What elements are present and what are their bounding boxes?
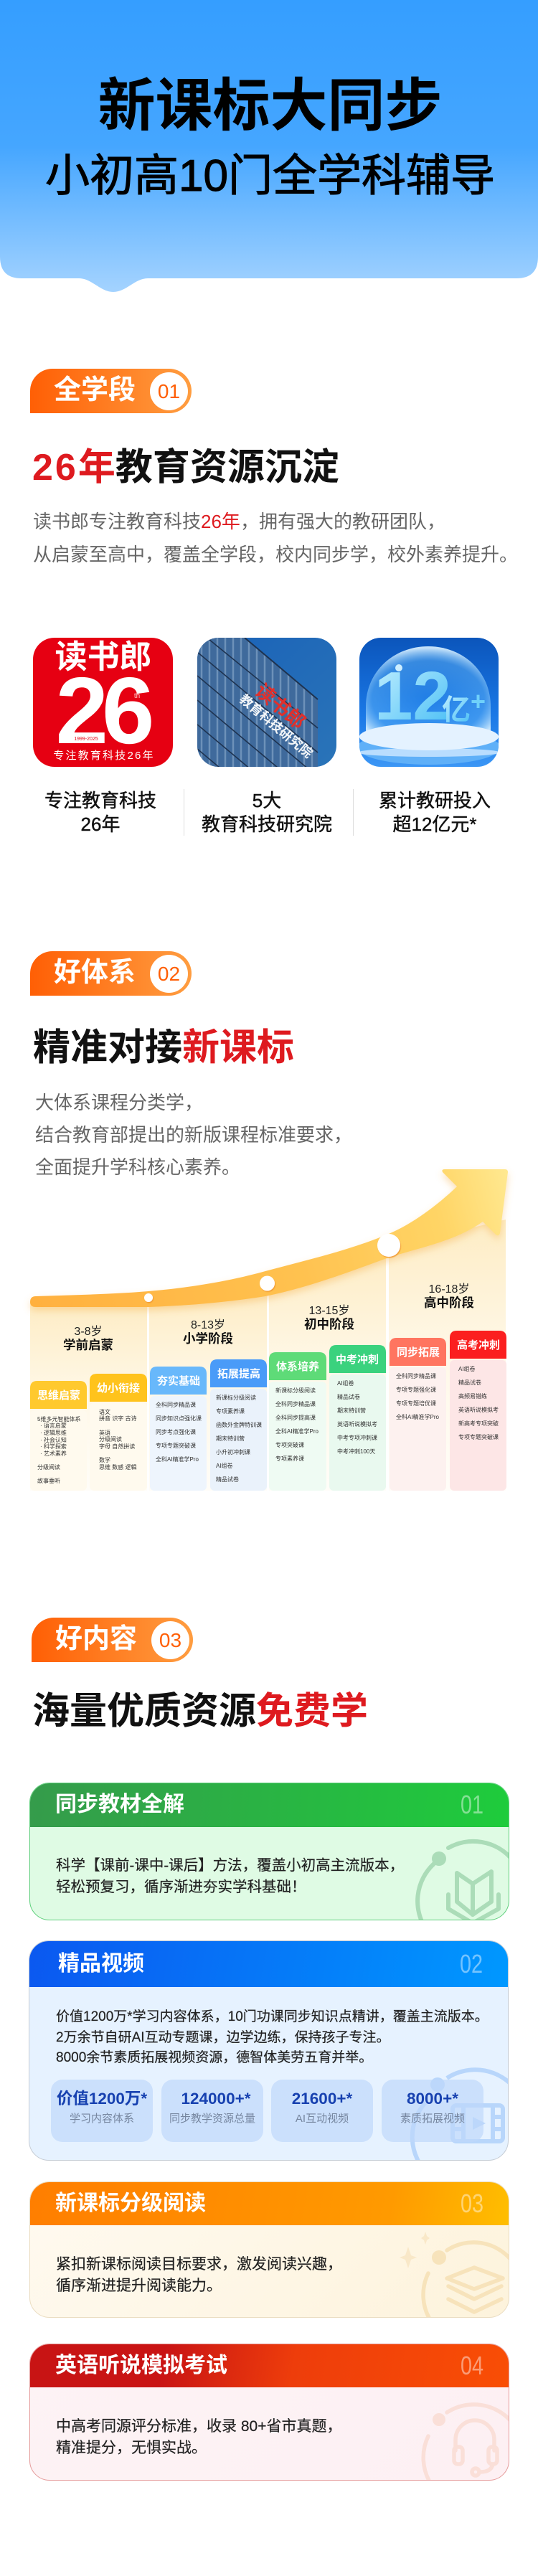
image: 读书郎 26th logo bbox=[33, 638, 173, 767]
card: 拓展提高: 函数外金牌特训课 bbox=[216, 1421, 262, 1428]
caption: 累计教研投入 超12亿元 bbox=[379, 790, 491, 835]
stat: 124000+: 同步教学资源总量 bbox=[169, 2113, 255, 2125]
stat: 124000+: 124000+* bbox=[181, 2090, 250, 2108]
card: 体系培养 bbox=[269, 1352, 326, 1491]
stat: 21600+ bbox=[271, 2080, 373, 2142]
image: 读书郎 26th logo: 1999-2025 bbox=[74, 737, 98, 742]
header bbox=[29, 1783, 509, 1827]
stage: 高中阶段: 高中阶段 bbox=[424, 1296, 474, 1310]
card: 体系培养: 全科AI精准学Pro bbox=[275, 1428, 319, 1435]
stat: 21600+: AI互动视频 bbox=[296, 2113, 349, 2125]
header: 04 bbox=[461, 2351, 483, 2380]
image: research institute building: 教育科技研究院 bbox=[237, 691, 316, 761]
image: 读书郎 26th logo: 26 bbox=[56, 658, 151, 763]
card: 思维启蒙: 故事垂听 bbox=[37, 1477, 60, 1484]
card: 思维启蒙: 分级阅读 bbox=[37, 1463, 60, 1471]
image: 读书郎 26th logo: 读书郎 bbox=[55, 638, 152, 675]
card: 高考冲刺: 英语听说模拟考 bbox=[458, 1406, 499, 1413]
header: 02 bbox=[460, 1949, 483, 1978]
card: 夯实基础: 同步知识点强化课 bbox=[156, 1415, 202, 1422]
card: 思维启蒙: 思维启蒙 bbox=[37, 1389, 80, 1402]
paragraph: 大体系课程分类学: 结合教育部提出的新版课程标准要求， bbox=[35, 1124, 352, 1146]
card: 同步拓展: 专项专题强化课 bbox=[396, 1386, 436, 1393]
panel: 同步教材全解 bbox=[29, 1783, 509, 1920]
caption: 累计教研投入 超12亿元: 超12亿元* bbox=[392, 813, 477, 835]
rising arrow bbox=[30, 1169, 508, 1307]
description: 8000余节素质拓展视频资源，德智体美劳五育并举。 bbox=[56, 2050, 372, 2065]
card: 同步拓展: 专项专题培优课 bbox=[396, 1400, 436, 1407]
card: 拓展提高: 精品试卷 bbox=[216, 1476, 239, 1483]
section badge: 好内容 03 bbox=[32, 1618, 193, 1662]
card: 幼小衔接: 英语 bbox=[99, 1429, 110, 1436]
card: 幼小衔接: 幼小衔接 bbox=[97, 1382, 140, 1395]
image: 读书郎 26th logo: 专注教育科技26年 bbox=[53, 750, 155, 762]
card: 思维启蒙: · 社会认知 bbox=[40, 1436, 67, 1443]
card: 高考冲刺: AI组卷 bbox=[458, 1365, 476, 1372]
card: 高考冲刺 bbox=[450, 1331, 506, 1491]
header bbox=[29, 2344, 509, 2387]
image: 12亿+ glass dome: + bbox=[471, 687, 486, 716]
paragraph: 大体系课程分类学 bbox=[35, 1092, 352, 1178]
caption: 5大 教育科技研究院: 5大 bbox=[253, 790, 281, 811]
card: 高考冲刺: 高频易错练 bbox=[458, 1392, 487, 1400]
card: 中考冲刺: 中考冲刺100天 bbox=[337, 1448, 375, 1455]
description: 紧扣新课标阅读目标要求，激发阅读兴趣， bbox=[56, 2256, 342, 2273]
image: 读书郎 26th logo: th bbox=[134, 692, 140, 700]
card: 拓展提高: AI组卷 bbox=[216, 1462, 233, 1469]
paragraph: 大体系课程分类学: 全面提升学科核心素养。 bbox=[35, 1156, 240, 1178]
section badge: 全学段 01: 全学段 bbox=[54, 375, 136, 405]
heading: 精准对接新课标: 精准对接新课标 bbox=[33, 1027, 294, 1069]
stage: 高中阶段 bbox=[424, 1283, 474, 1310]
caption: 5大 教育科技研究院: 教育科技研究院 bbox=[202, 813, 332, 835]
card: 幼小衔接: 拼音 识字 古诗 bbox=[99, 1415, 136, 1422]
description: 循序渐进提升阅读能力。 bbox=[56, 2278, 222, 2294]
stat: 21600+: 21600+* bbox=[292, 2090, 352, 2108]
caption: 专注教育科技 26年: 专注教育科技 bbox=[44, 790, 156, 811]
card: 高考冲刺: 专项专题突破课 bbox=[458, 1433, 499, 1440]
stat: 8000+: 8000+* bbox=[407, 2090, 458, 2108]
card: 拓展提高 bbox=[210, 1359, 267, 1491]
icon: layers ring bbox=[400, 2232, 509, 2317]
hero banner bbox=[0, 0, 538, 292]
description: 轻松预复习，循序渐进夯实学科基础！ bbox=[56, 1878, 306, 1895]
intro paragraph: 读书郎专注教育科技26年，拥有强大的教研团队， bbox=[33, 511, 445, 532]
card: 体系培养: 专项素养课 bbox=[275, 1455, 304, 1462]
card: 思维启蒙: · 语言启蒙 bbox=[40, 1422, 67, 1429]
card: 高考冲刺: 新高考专项突破 bbox=[458, 1420, 499, 1427]
intro paragraph: 从启蒙至高中，覆盖全学段，校内同步学，校外素养提升。 bbox=[33, 544, 518, 565]
card: 同步拓展: 全科AI精准学Pro bbox=[396, 1413, 440, 1420]
section badge: 好内容 03: 好内容 bbox=[55, 1624, 137, 1654]
description bbox=[56, 1857, 404, 1895]
icon: book ring bbox=[415, 1839, 509, 1920]
caption: 5大 教育科技研究院 bbox=[202, 790, 332, 835]
stage: 初中阶段 bbox=[304, 1304, 354, 1331]
card: 幼小衔接: 字母 自然拼读 bbox=[99, 1443, 135, 1450]
stat: 124000+ bbox=[161, 2080, 263, 2142]
card: 拓展提高: 新课标分级阅读 bbox=[216, 1394, 256, 1401]
card: 体系培养: 体系培养 bbox=[276, 1360, 319, 1373]
stage: 小学阶段: 8-13岁 bbox=[191, 1318, 225, 1331]
section badge: 全学段 01: 01 bbox=[158, 380, 180, 402]
stage: 学前启蒙 bbox=[63, 1325, 113, 1352]
card: 体系培养: 全科同步提高课 bbox=[275, 1414, 316, 1421]
card: 夯实基础 bbox=[150, 1367, 207, 1491]
header bbox=[29, 1940, 509, 1987]
title line 1: 新课标大同步 bbox=[98, 74, 442, 138]
card: 体系培养: 新课标分级阅读 bbox=[275, 1387, 316, 1394]
description bbox=[56, 2417, 341, 2456]
card: 中考冲刺: 中考冲刺 bbox=[336, 1354, 379, 1366]
stage: 初中阶段: 初中阶段 bbox=[304, 1317, 354, 1331]
stage: 小学阶段: 小学阶段 bbox=[183, 1331, 233, 1346]
header: 英语听说模拟考试 bbox=[55, 2354, 227, 2377]
description bbox=[56, 2009, 489, 2065]
stage: 高中阶段: 16-18岁 bbox=[429, 1283, 469, 1296]
card: 体系培养: 全科同步精品课 bbox=[275, 1400, 316, 1407]
header: 同步教材全解 bbox=[55, 1793, 184, 1816]
description: 科学【课前-课中-课后】方法，覆盖小初高主流版本， bbox=[56, 1857, 404, 1874]
card: 幼小衔接: 数学 bbox=[99, 1456, 110, 1463]
stat: 8000+: 素质拓展视频 bbox=[400, 2113, 465, 2125]
card: 幼小衔接: 思维 数感 逻辑 bbox=[99, 1463, 136, 1471]
card: 拓展提高: 小升初冲刺课 bbox=[216, 1448, 250, 1456]
section badge: 好体系 02: 好体系 bbox=[54, 958, 136, 988]
card: 夯实基础: 夯实基础 bbox=[157, 1374, 200, 1387]
card: 思维启蒙: · 艺术素养 bbox=[40, 1450, 67, 1457]
caption: 专注教育科技 26年 bbox=[44, 790, 156, 835]
card: 中考冲刺: 期末特训营 bbox=[337, 1407, 366, 1414]
heading: 海量优质资源免费学: 海量优质资源免费学 bbox=[32, 1691, 368, 1732]
image: research institute building: 读书郎 bbox=[251, 680, 309, 734]
card: 中考冲刺: AI组卷 bbox=[337, 1379, 354, 1387]
header: 03 bbox=[461, 2189, 483, 2218]
card: 幼小衔接 bbox=[90, 1374, 147, 1491]
section badge: 好体系 02: 02 bbox=[158, 963, 180, 985]
header: 精品视频 bbox=[58, 1952, 144, 1976]
card: 拓展提高: 专项素养课 bbox=[216, 1407, 245, 1415]
card: 中考冲刺: 英语听说模拟考 bbox=[337, 1420, 377, 1428]
card: 中考冲刺 bbox=[329, 1345, 386, 1491]
image: 12亿+ glass dome: 12 bbox=[374, 658, 451, 735]
description: 中高考同源评分标准，收录 80+省市真题， bbox=[56, 2418, 341, 2435]
card: 夯实基础: 全科同步精品课 bbox=[156, 1401, 196, 1408]
card: 中考冲刺: 中考专项冲刺课 bbox=[337, 1434, 377, 1441]
caption: 专注教育科技 26年: 26年 bbox=[81, 813, 120, 835]
stat: 价值1200万 bbox=[51, 2080, 153, 2142]
stage: 初中阶段: 13-15岁 bbox=[309, 1304, 349, 1317]
stage: 学前启蒙: 学前启蒙 bbox=[63, 1338, 113, 1352]
card: 拓展提高: 拓展提高 bbox=[217, 1367, 260, 1380]
card: 思维启蒙: · 逻辑思维 bbox=[40, 1429, 67, 1436]
card: 夯实基础: 专项专题突破课 bbox=[156, 1442, 196, 1449]
card: 中考冲刺: 精品试卷 bbox=[337, 1393, 360, 1400]
description: 精准提分，无惧实战。 bbox=[56, 2440, 207, 2456]
heading: 26年教育资源沉淀: 26年教育资源沉淀 bbox=[32, 447, 339, 489]
card: 夯实基础: 同步考点强化课 bbox=[156, 1428, 196, 1435]
stat: 8000+ bbox=[382, 2080, 483, 2142]
stat: 价值1200万: 价值1200万* bbox=[57, 2090, 147, 2108]
paragraph: 大体系课程分类学: 大体系课程分类学， bbox=[35, 1092, 203, 1113]
stage column backgrounds bbox=[30, 1219, 506, 1491]
section badge: 好体系 02 bbox=[30, 951, 192, 996]
card: 高考冲刺: 高考冲刺 bbox=[457, 1339, 500, 1351]
panel: 新课标分级阅读 bbox=[29, 2181, 509, 2318]
icon: headset ring bbox=[422, 2402, 509, 2480]
header: 01 bbox=[461, 1790, 483, 1819]
title line 2: 小初高10门全学科辅导 bbox=[45, 151, 495, 201]
card: 高考冲刺: 精品试卷 bbox=[458, 1379, 481, 1386]
icon: film ring bbox=[410, 2067, 508, 2160]
card: 同步拓展 bbox=[390, 1338, 446, 1491]
stage: 学前启蒙: 3-8岁 bbox=[74, 1325, 103, 1338]
card: 幼小衔接: 语文 bbox=[99, 1408, 110, 1415]
panel: 精品视频 bbox=[29, 1940, 509, 2161]
card: 同步拓展: 同步拓展 bbox=[397, 1346, 440, 1359]
description: 2万余节自研AI互动专题课，边学边练，保持孩子专注。 bbox=[56, 2030, 390, 2044]
header bbox=[29, 2181, 509, 2225]
card: 思维启蒙 bbox=[30, 1381, 87, 1491]
stage: 小学阶段 bbox=[183, 1318, 233, 1346]
image: research institute building bbox=[197, 638, 336, 767]
image: 12亿+ glass dome bbox=[359, 638, 499, 767]
card: 拓展提高: 期末特训营 bbox=[216, 1435, 245, 1442]
panel: 英语听说模拟考试 bbox=[29, 2344, 509, 2481]
header: 新课标分级阅读 bbox=[55, 2192, 206, 2215]
intro paragraph bbox=[33, 511, 518, 565]
growth chart bbox=[27, 1169, 511, 1491]
card: 同步拓展: 全科同步精品课 bbox=[396, 1372, 436, 1379]
description bbox=[56, 2255, 342, 2294]
caption: 累计教研投入 超12亿元: 累计教研投入 bbox=[379, 790, 491, 811]
section badge: 好内容 03: 03 bbox=[159, 1629, 181, 1651]
card: 夯实基础: 全科AI精准学Pro bbox=[156, 1456, 199, 1463]
section badge: 全学段 01 bbox=[30, 369, 192, 413]
image: 12亿+ glass dome: 亿 bbox=[442, 694, 471, 726]
card: 幼小衔接: 分级阅读 bbox=[99, 1435, 122, 1443]
description: 价值1200万*学习内容体系，10门功课同步知识点精讲，覆盖主流版本。 bbox=[56, 2009, 489, 2024]
card: 思维启蒙: 5维多元智能体系 bbox=[37, 1415, 80, 1423]
stat: 价值1200万: 学习内容体系 bbox=[70, 2113, 134, 2125]
card: 体系培养: 专项突破课 bbox=[275, 1441, 304, 1448]
card: 思维启蒙: · 科学探索 bbox=[40, 1443, 67, 1450]
